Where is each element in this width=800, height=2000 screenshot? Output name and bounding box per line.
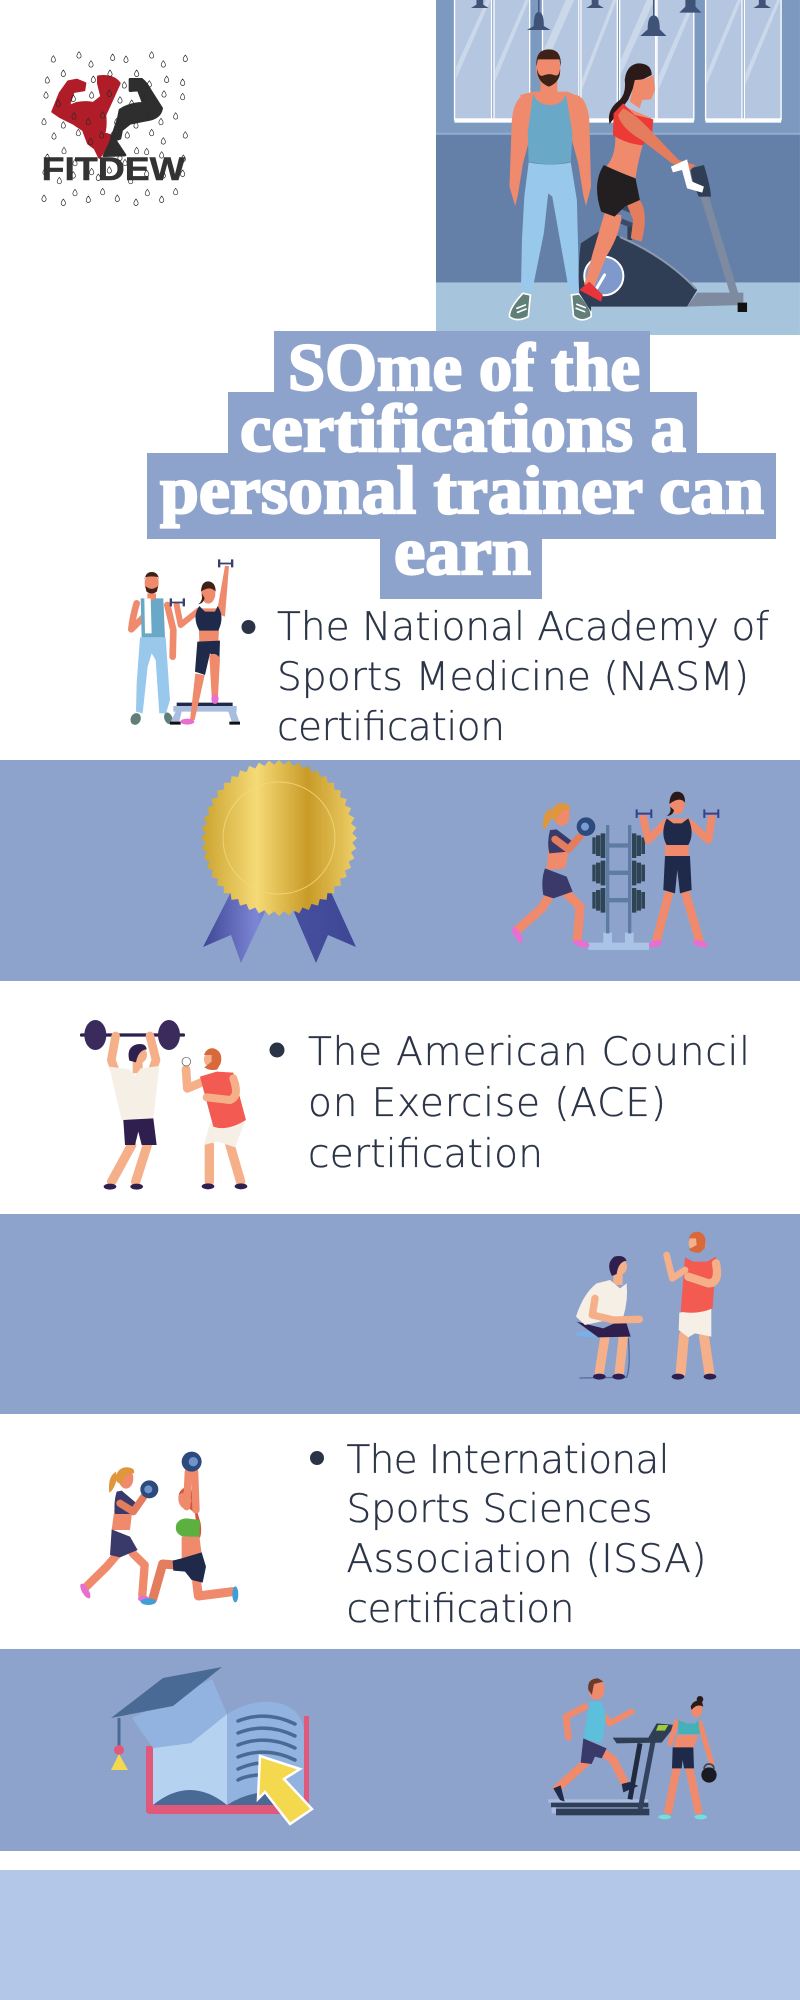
title: certifications a: [240, 390, 686, 466]
pendant lamps: [471, 0, 771, 36]
right woman: [636, 792, 719, 949]
bullet: ACE certification: certification: [308, 1132, 543, 1177]
icon: open book with graduation cap and cursor: [111, 1667, 312, 1824]
bullet: ISSA certification: certification: [346, 1587, 574, 1632]
illustration: lifter and coach with stopwatch: [80, 1020, 247, 1190]
illustration: treadmill runner and woman with kettlebell: [548, 1678, 717, 1819]
illustration: women with dumbbell rack: [510, 792, 719, 950]
bullet: ISSA certification: Sports Sciences: [346, 1487, 652, 1532]
logo: FITDEW: [42, 52, 187, 205]
logo: sweat droplets: [42, 52, 187, 205]
illustration: women lifting dumbbells: [78, 1452, 238, 1605]
logo: red muscle figure: [53, 76, 119, 157]
exercise bike: [579, 165, 747, 312]
icon: gold medal with ribbons: [199, 758, 359, 963]
bullet: ACE certification: The American Council: [308, 1030, 750, 1075]
logo wordmark: FITDEW: [42, 151, 186, 187]
woman on bike: [579, 63, 704, 302]
band 1: [0, 760, 800, 981]
bullet: ISSA certification: Association (ISSA): [346, 1537, 706, 1582]
runner: [553, 1678, 638, 1802]
logo: dark muscle figure: [104, 79, 162, 156]
band 2: [0, 1214, 800, 1414]
footer band: [0, 1870, 800, 2000]
left woman: [510, 803, 595, 949]
bullet: ISSA certification: [310, 1438, 706, 1632]
illustration: trainers with dumbbells on step: [129, 559, 240, 727]
bullet: NASM certification: Sports Medicine (NASM): [277, 655, 749, 700]
bullet: NASM certification: [242, 605, 769, 750]
illustration: seated client and coach: [576, 1232, 717, 1380]
woman with kettlebell: [658, 1696, 717, 1819]
bullet: ISSA certification: The International: [346, 1438, 670, 1483]
bullet: ACE certification: [270, 1030, 750, 1177]
title: [147, 329, 776, 599]
title: personal trainer can: [160, 452, 764, 528]
title: SOme of the: [288, 329, 640, 405]
bullet: NASM certification: certification: [277, 705, 505, 750]
trainer man: [509, 49, 591, 320]
band 3: [0, 1649, 800, 1851]
gym scene illustration: [436, 0, 800, 335]
bullet: NASM certification: The National Academy of: [277, 605, 769, 650]
title: earn: [394, 513, 531, 589]
bullet: ACE certification: on Exercise (ACE): [308, 1081, 666, 1126]
